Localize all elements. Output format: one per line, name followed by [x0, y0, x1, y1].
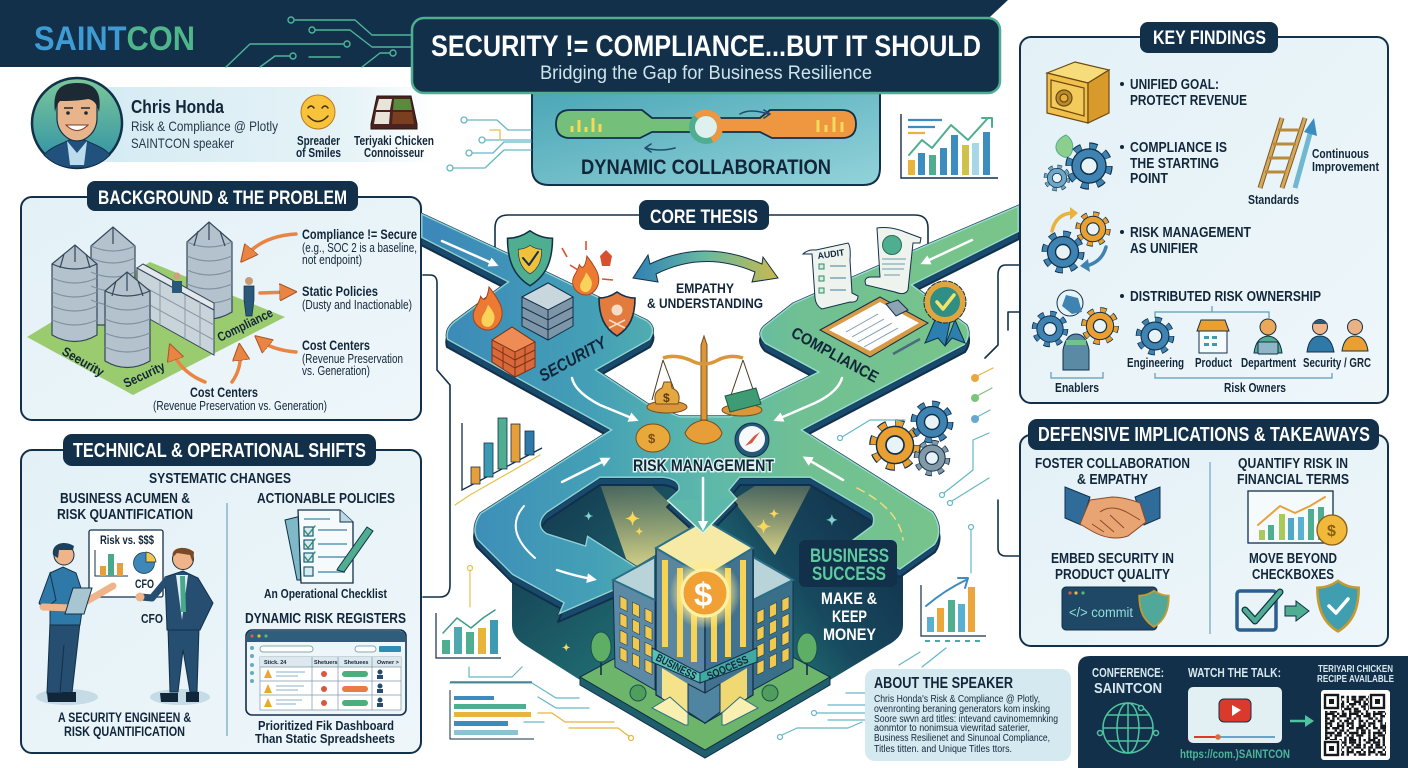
icon: compass: [735, 423, 769, 457]
smile and chicken captions: [296, 134, 434, 160]
icon: globe: [1098, 703, 1158, 753]
finding: unified goal: [1120, 77, 1247, 109]
illustration: silos and wall: Seeurity: [60, 344, 107, 380]
illustration: risk board: CFO: [135, 579, 154, 591]
icon: shield: [508, 231, 552, 286]
icon: glowing coin: [669, 557, 741, 629]
icon: bug and sparks: [562, 241, 613, 280]
caption: security engineer: RISK QUANTIFICATION: [64, 724, 185, 739]
heading: [63, 434, 376, 466]
labels: ladder: Continuous: [1312, 147, 1369, 161]
sparkles: ✦: [756, 517, 771, 537]
labels: owners: Enablers: [1055, 381, 1099, 395]
illustration: silos and wall: Compliance: [215, 305, 275, 345]
left wing: [613, 557, 655, 690]
subtitle: Bridging the Gap for Business Resilience: [540, 63, 872, 84]
panel: about the speaker: ovenronting beraning generators kom insking: [874, 704, 1050, 715]
sparkles: ✦: [826, 512, 838, 528]
panel: about the speaker: Business Resilienet and Sinunoal Compliance,: [874, 733, 1050, 744]
empathy arrows: & UNDERSTANDING: [647, 296, 763, 311]
heading: [87, 181, 358, 211]
speaker name and role: SAINTCON speaker: [131, 135, 234, 151]
caption: checklist: An Operational Checklist: [264, 586, 388, 601]
problem labels: vs. Generation): [302, 364, 370, 378]
icon: audit scroll: AUDIT: [817, 247, 846, 261]
labels: owners: Engineering: [1127, 356, 1184, 370]
icon: bento box: [371, 96, 417, 129]
watch the talk: https://com.)SAINTCON: [1180, 747, 1290, 761]
illustration: silos and wall: Security: [121, 358, 168, 391]
problem labels: (Revenue Preservation: [302, 352, 403, 366]
chart: isometric bars: [455, 418, 542, 505]
speaker name and role: Risk & Compliance @ Plotly: [131, 118, 278, 134]
finding: risk management as unifier: RISK MANAGEMENT: [1130, 225, 1251, 241]
finding: compliance is the starting point: POINT: [1130, 171, 1168, 187]
arrows on road: [442, 240, 972, 579]
icon: flames: [473, 256, 599, 330]
sparkles: ✦: [769, 507, 779, 521]
icon: certificate scroll: [865, 228, 921, 294]
heading: CORE THESIS: [650, 207, 758, 228]
panel: defensive implications and takeaways: [1020, 419, 1388, 646]
labels: owners: Product: [1195, 356, 1233, 370]
logo: SAINTCON: SAINTCON: [34, 20, 195, 58]
labels: owners: Risk Owners: [1224, 381, 1286, 395]
recipe label: [1317, 663, 1394, 685]
dashboard: Shetuees: [344, 660, 368, 666]
sparkles: ✦: [584, 511, 593, 523]
takeaway: quantify risk: QUANTIFY RISK IN: [1238, 456, 1348, 472]
subheadings: RISK QUANTIFICATION: [57, 507, 193, 523]
labels: ladder: Improvement: [1312, 160, 1380, 174]
panel: core thesis frame: [495, 200, 928, 260]
heading: [1028, 419, 1379, 450]
finding: risk management as unifier: [1120, 225, 1251, 257]
icon: server: [522, 283, 573, 340]
smile and chicken captions: Teriyaki Chicken: [354, 134, 434, 148]
sparkles: ✦: [635, 527, 643, 538]
road: security and compliance converge: [421, 205, 1019, 622]
caption: dashboard: [255, 718, 395, 746]
panel: background and the problem: [21, 181, 421, 420]
chart: top right of center: [901, 114, 998, 178]
conference label: [1092, 666, 1164, 697]
sparkles: [562, 507, 838, 654]
labels: owners: [1055, 356, 1371, 395]
icon: compliance gears: [1046, 135, 1109, 189]
heading: [1140, 22, 1278, 53]
problem labels: (Dusty and Inactionable): [302, 298, 412, 312]
speaker avatar: [32, 78, 122, 168]
finding: compliance is the starting point: [1120, 140, 1227, 187]
icon: glowing coin: $: [694, 576, 712, 613]
empathy arrows: [633, 251, 778, 311]
panel: about the speaker: Chris Honda's Risk & Compliance @ Plotly,: [874, 694, 1040, 705]
chart: lower right: [921, 578, 986, 641]
takeaway: quantify risk: $: [1327, 523, 1336, 540]
callout: business success: [799, 540, 897, 644]
circuit decoration: header: [226, 17, 412, 67]
subheadings: BUSINESS ACUMEN &: [60, 491, 190, 507]
labels: owners: Department: [1241, 356, 1297, 370]
labels: ladder: Standards: [1248, 193, 1299, 207]
illustration: silos and wall: [27, 222, 285, 395]
icon: unifier gears: [1045, 207, 1108, 272]
building: business success: [580, 520, 830, 758]
circuit decoration: side traces: [450, 368, 993, 740]
panel: about the speaker: aonmtor to nonimsua viewritad saterier,: [874, 723, 1030, 734]
watch the talk: WATCH THE TALK:: [1188, 666, 1281, 680]
panel: technical and operational shifts: [21, 434, 421, 753]
callout: business success: KEEP: [832, 608, 867, 626]
icon: smiley: [301, 95, 335, 129]
problem labels: Static Policies: [302, 284, 378, 299]
smile and chicken captions: of Smiles: [296, 146, 341, 160]
icon: engineering gear: [1139, 320, 1171, 352]
title: SECURITY != COMPLIANCE...BUT IT SHOULD: [431, 30, 981, 63]
heading: BACKGROUND & THE PROBLEM: [98, 188, 347, 209]
icon: collaboration link: [556, 110, 856, 152]
takeaway: move beyond checkboxes: MOVE BEYOND: [1249, 551, 1337, 567]
icon: ladder: [1260, 118, 1317, 188]
label: EMPATHY: [676, 281, 734, 296]
building: business success: SOOCESS: [705, 654, 750, 683]
takeaway: embed security: </> commit: [1069, 605, 1133, 620]
conference label: SAINTCON: [1094, 681, 1162, 697]
speaker name and role: Chris Honda: [131, 96, 225, 117]
illustration: risk board: [89, 530, 163, 597]
smile and chicken captions: Spreader: [297, 134, 340, 148]
illustration: security engineer: [36, 543, 113, 705]
speaker name and role: [131, 96, 278, 151]
takeaway: quantify risk: [1237, 456, 1349, 545]
sparkles: ✦: [625, 509, 640, 529]
sparkles: ✦: [562, 643, 570, 654]
heading: dynamic risk registers: DYNAMIC RISK REGISTERS: [245, 611, 406, 627]
light rays: [600, 484, 812, 570]
icon: coin: [636, 424, 670, 452]
conference label: CONFERENCE:: [1092, 666, 1164, 680]
problem labels: Compliance != Secure: [302, 227, 417, 242]
labels: ladder: [1248, 147, 1380, 207]
panel: about the speaker: Titles titten. and Unique Titles ttors.: [874, 744, 1012, 755]
panel: dynamic collaboration: [532, 90, 880, 185]
takeaway: foster collaboration: [1035, 456, 1190, 538]
problem labels: [153, 227, 417, 413]
compliance platform items: [788, 228, 966, 387]
takeaway: embed security: [1051, 551, 1174, 630]
takeaway: embed security: PRODUCT QUALITY: [1055, 567, 1170, 583]
title banner: [412, 18, 1000, 93]
caption: security engineer: A SECURITY ENGINEEN &: [58, 710, 191, 725]
finding: risk management as unifier: AS UNIFIER: [1130, 241, 1198, 257]
problem labels: (e.g., SOC 2 is a baseline,: [302, 241, 417, 255]
QR code: [1321, 690, 1390, 760]
dashboard: Owner >: [377, 660, 399, 666]
icon: security and GRC people: [1307, 320, 1368, 352]
finding: compliance is the starting point: COMPLIANCE IS: [1130, 140, 1227, 156]
callout: business success: MAKE &: [821, 590, 877, 608]
circuit decoration: left of collaboration: [447, 117, 531, 171]
panel: about the speaker: ABOUT THE SPEAKER: [874, 675, 1013, 692]
finding: unified goal: UNIFIED GOAL:: [1130, 77, 1219, 93]
icon: badge: [924, 281, 966, 346]
caption: security engineer: [58, 710, 191, 739]
takeaway: foster collaboration: & EMPATHY: [1077, 472, 1148, 488]
label: security: SECURITY: [536, 332, 611, 385]
label: DYNAMIC COLLABORATION: [581, 156, 831, 179]
dashboard: [246, 630, 406, 715]
scales of balance: [647, 336, 762, 444]
labels: owners: Security / GRC: [1303, 356, 1371, 370]
right wing: [753, 557, 793, 690]
problem labels: (Revenue Preservation vs. Generation): [153, 399, 327, 413]
problem labels: not endpoint): [302, 253, 362, 267]
heading: [639, 200, 769, 230]
trees: [591, 632, 817, 701]
callout: business success: MONEY: [823, 626, 876, 644]
illustration: CFO: CFO: [141, 612, 163, 626]
takeaway: move beyond checkboxes: [1237, 551, 1359, 631]
building: business success: BUSINESS: [654, 652, 698, 683]
callout: business success: BUSINESS: [810, 546, 889, 567]
icon: firewall: [492, 327, 535, 377]
icon: coin: $: [648, 431, 656, 446]
icon: department person: [1254, 319, 1282, 354]
subheadings: SYSTEMATIC CHANGES: [149, 471, 291, 487]
panel: key findings: [1020, 22, 1388, 403]
problem labels: Cost Centers: [190, 385, 258, 400]
subheadings: ACTIONABLE POLICIES: [257, 491, 395, 507]
takeaway: quantify risk: FINANCIAL TERMS: [1237, 472, 1349, 488]
icon: enablers: [1035, 290, 1116, 370]
business success dark base: [512, 478, 903, 755]
icon: safe: [1047, 62, 1109, 123]
heading: KEY FINDINGS: [1153, 28, 1266, 49]
problem arrows: [172, 234, 296, 382]
icon: policy checklist: [285, 510, 373, 583]
watch the talk: [1180, 666, 1290, 761]
illustration: CFO: [136, 548, 213, 705]
takeaway: move beyond checkboxes: CHECKBOXES: [1252, 567, 1334, 583]
panel: links footer: [1078, 656, 1408, 768]
illustration: risk board: Risk vs. $$$: [100, 535, 154, 547]
security platform items: [473, 231, 635, 385]
arrow to QR: [1290, 715, 1314, 727]
smile and chicken captions: Connoisseur: [364, 146, 424, 160]
finding: distributed risk ownership: DISTRIBUTED RISK OWNERSHIP: [1130, 289, 1321, 305]
caption: dashboard: Than Static Spreadsheets: [255, 731, 395, 746]
finding: unified goal: PROTECT REVENUE: [1130, 93, 1247, 109]
chart: lower left line: [436, 610, 501, 658]
finding: compliance is the starting point: THE STARTING: [1130, 156, 1219, 172]
subheadings: [57, 471, 395, 523]
heading: TECHNICAL & OPERATIONAL SHIFTS: [73, 440, 366, 462]
dashboard: Stick. 24: [264, 660, 287, 666]
header banner: [0, 0, 1008, 67]
center arrow into building: [667, 478, 737, 533]
scales of balance: $: [663, 391, 670, 405]
dashboard: Shetuers: [314, 660, 338, 666]
chart: list bars: [450, 682, 534, 739]
icon: product store: [1197, 320, 1229, 353]
label: compliance: COMPLIANCE: [788, 325, 881, 387]
problem labels: Cost Centers: [302, 338, 370, 353]
caption: dashboard: Prioritized Fik Dashboard: [258, 718, 394, 733]
icon: threat shield: [599, 292, 635, 336]
panel: about the speaker: [865, 669, 1071, 761]
takeaway: embed security: EMBED SECURITY IN: [1051, 551, 1174, 567]
callout: business success: SUCCESS: [812, 564, 886, 585]
icon: audit scroll: [803, 243, 858, 309]
panel: about the speaker: Soore swvn ard titles: intevand cavinomemnking: [874, 714, 1058, 725]
speaker strip: [32, 78, 435, 168]
icon: side gears: [873, 404, 950, 473]
label: risk management: RISK MANAGEMENT: [633, 456, 775, 475]
icon: clipboard: [820, 297, 928, 357]
connector lines: [423, 265, 1020, 597]
takeaway: foster collaboration: FOSTER COLLABORATION: [1035, 456, 1190, 472]
